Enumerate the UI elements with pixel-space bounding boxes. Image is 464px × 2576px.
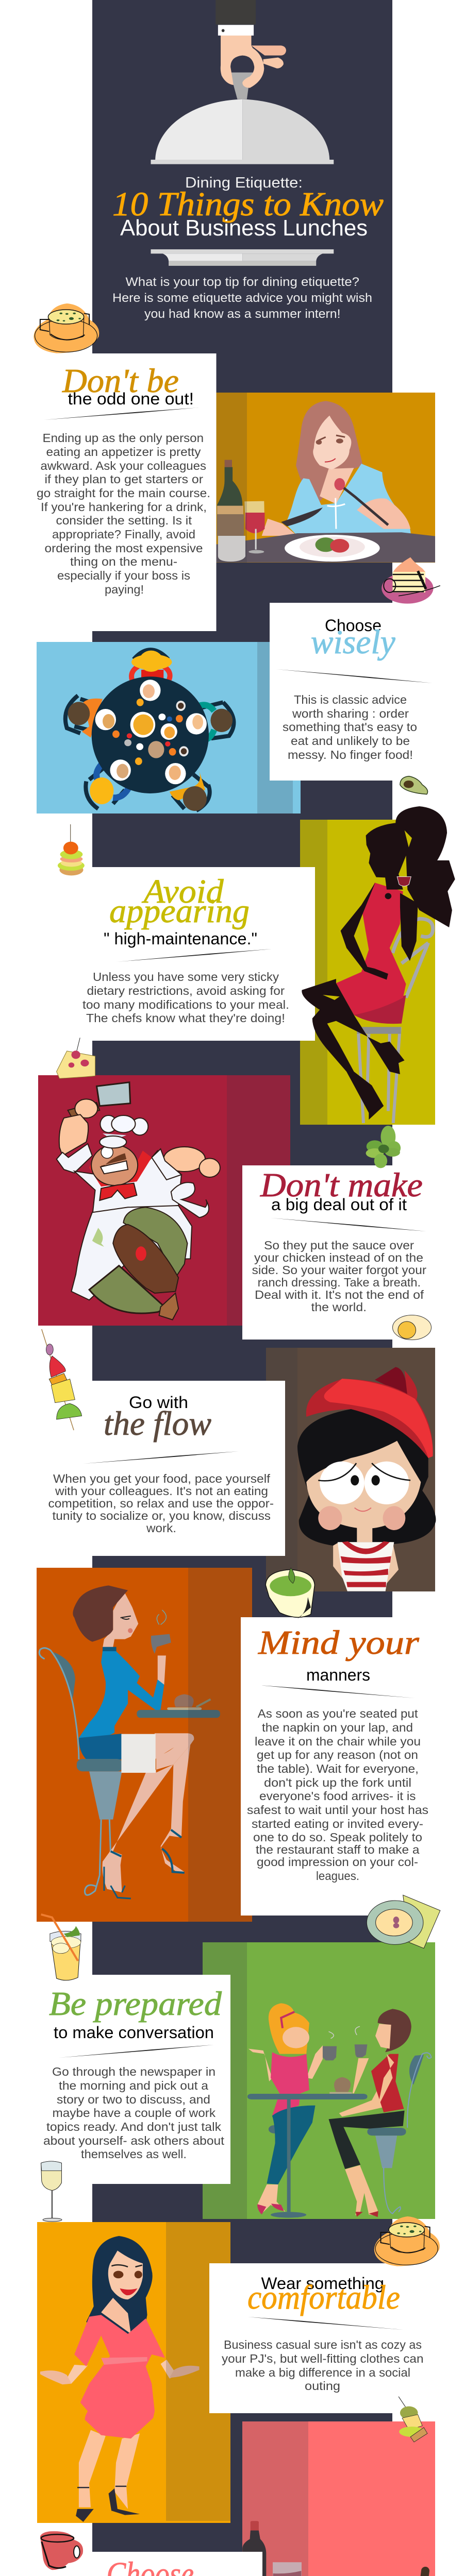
body text: your PJ's, but well-fitting clothes can (222, 2352, 424, 2365)
body text: Ending up as the only person (42, 431, 204, 445)
body text: competition, so relax and use the oppor- (48, 1497, 274, 1510)
body text: too many modifications to your meal. (82, 998, 289, 1011)
body text (43, 2065, 225, 2161)
body text: don't pick up the fork until (264, 1776, 411, 1789)
icon: cheese with cherry (57, 1038, 95, 1078)
body text: safest to wait until your host has (247, 1803, 428, 1817)
round table seen from above (65, 650, 234, 811)
card: avoid appearing high-maintenance: appearing (109, 892, 250, 930)
body text (48, 1472, 274, 1535)
body text (252, 1239, 426, 1314)
body text: eating an appetizer is pretty (46, 445, 201, 459)
heading: Choose (325, 616, 382, 635)
body text: paying! (105, 583, 144, 596)
body text: leave it on the chair while you (255, 1735, 421, 1748)
heading: Wear something (261, 2274, 384, 2293)
body text: Business casual sure isn't as cozy as (224, 2338, 422, 2351)
intro text: What is your top tip for dining etiquette? (126, 275, 359, 289)
body text: ranch dressing. Take a breath. (258, 1276, 421, 1289)
header illustration: hand lifting cloche (151, 0, 334, 266)
card: wear something comfortable: comfortable (247, 2279, 400, 2316)
body text: The chefs know what they're doing! (86, 1011, 285, 1025)
woman in pink wrap dress (40, 2236, 200, 2522)
body text: the table). Wait for everyone, (257, 1762, 419, 1775)
icon: canape skewer (58, 824, 85, 875)
two women talking over coffee (247, 2003, 432, 2218)
panel: go with the flow illustration (266, 1348, 436, 1591)
card: don't be the odd one out: the odd one out! (68, 389, 194, 408)
body text: topics ready. And don't just talk (46, 2120, 222, 2133)
intro text: you had know as a summer intern! (144, 307, 340, 321)
heading: Mind your (258, 1624, 419, 1662)
body text: with your colleagues. It's not an eating (55, 1484, 268, 1498)
body text: maybe have a couple of work (53, 2106, 216, 2120)
body text: the restaurant staff to make a (256, 1843, 420, 1856)
angry chef (57, 1082, 220, 1320)
illustration: silhouette woman with wine (302, 806, 455, 1123)
icon: boiled egg (393, 1315, 432, 1340)
body text (247, 1707, 428, 1883)
heading: Don't be (62, 362, 179, 400)
body text: If you're hankering for a drink, (41, 500, 207, 514)
panel: choose your seat illustration (242, 2421, 435, 2576)
card: be prepared to make conversation (43, 1975, 230, 2184)
card: go with the flow: the flow (104, 1405, 211, 1443)
icon: soup cup on saucer, repeated (374, 2216, 440, 2266)
body text: if they plan to get starters or (44, 472, 203, 486)
body text: So they put the sauce over (264, 1239, 414, 1252)
card: avoid appearing high-maintenance: " high-maintenance." (104, 929, 257, 948)
body text: awkward. Ask your colleagues (40, 459, 206, 472)
body text (82, 970, 289, 1025)
body text: especially if your boss is (57, 569, 190, 582)
body text: everyone's food arrives- it is (259, 1789, 416, 1803)
body text (283, 693, 417, 761)
panel: don't be the odd one out illustration (216, 393, 435, 563)
card: mind your manners: manners (306, 1666, 370, 1684)
table setting, chair and plant (242, 2521, 430, 2576)
girl in red beret (297, 1367, 436, 1591)
card: choose your seat carefully (56, 2552, 262, 2576)
body text: the napkin on your lap, and (262, 1721, 413, 1734)
icon: green drink (266, 1568, 314, 1619)
woman at cafe table (39, 1585, 220, 1899)
body text: the world. (311, 1300, 367, 1314)
body text: started eating or invited every- (252, 1817, 423, 1831)
body text: thing on the menu- (70, 555, 177, 568)
icon: champagne flute (41, 2161, 62, 2222)
icon: lemonade glass (41, 1914, 81, 1980)
icon: layered dessert (382, 557, 440, 604)
body text: ordering the most expensive (44, 541, 203, 555)
body text: Go through the newspaper in (52, 2065, 216, 2078)
title block: About Business Lunches (120, 215, 368, 241)
body text: themselves as well. (81, 2147, 187, 2161)
icon: fruit skewer (42, 1329, 82, 1430)
body text: As soon as you're seated put (258, 1707, 418, 1720)
card: don't be the odd one out (37, 353, 217, 631)
body text: leagues. (316, 1869, 359, 1883)
body text: consider the setting. Is it (56, 514, 192, 527)
body text: Unless you have some very sticky (93, 970, 279, 984)
body text: appropriate? Finally, avoid (52, 528, 195, 541)
body text: good impression on your col- (257, 1855, 418, 1869)
body text: outing (305, 2379, 340, 2393)
title block: Dining Etiquette: (185, 175, 303, 191)
body text: eat and unlikely to be (291, 734, 410, 748)
card: go with the flow (48, 1381, 285, 1556)
body text: Deal with it. It's not the end of (255, 1288, 424, 1301)
card: choose wisely: wisely (311, 623, 395, 661)
body text: When you get your food, pace yourself (53, 1472, 271, 1485)
card: wear something comfortable (209, 2263, 424, 2413)
body text (222, 2338, 424, 2393)
panel: mind your manners illustration (37, 1568, 252, 1922)
body text: dietary restrictions, avoid asking for (87, 984, 285, 997)
card: avoid appearing high-maintenance (82, 867, 315, 1041)
body text: go straight for the main course. (37, 486, 210, 500)
body text: worth sharing : order (292, 707, 409, 720)
title block (112, 175, 384, 241)
icon: soup cup on saucer (34, 303, 99, 353)
icon: avocado (400, 776, 427, 794)
heading: Be prepared (49, 1985, 222, 2023)
body text: side. So your waiter forgot your (252, 1263, 426, 1277)
body text: messy. No finger food! (288, 748, 413, 761)
card: don't make a big deal out of it (242, 1165, 426, 1340)
icon: olive and cheese pick (399, 2397, 427, 2442)
card: mind your manners (241, 1617, 428, 1916)
woman eating at table (216, 401, 435, 563)
panel: don't make a big deal illustration (38, 1075, 290, 1326)
card: don't make a big deal out of it: a big deal out of it (271, 1195, 407, 1214)
body text: one to do so. Speak politely to (253, 1831, 422, 1844)
panel: be prepared illustration (203, 1942, 435, 2219)
body text: tunity to socialize or, you know, discuss (53, 1509, 271, 1522)
body text: This is classic advice (294, 693, 407, 706)
intro text: Here is some etiquette advice you might wish (112, 291, 372, 305)
body text: your chicken instead of on the (254, 1251, 423, 1264)
icon: red mug (40, 2531, 83, 2570)
heading: Go with (129, 1393, 188, 1412)
body text: make a big difference in a social (235, 2366, 410, 2379)
body text: work. (146, 1521, 176, 1535)
icon: mint sprig (366, 1126, 401, 1168)
heading: Avoid (142, 873, 224, 910)
body text: the morning and pick out a (59, 2079, 208, 2092)
card: choose wisely (270, 603, 432, 781)
card: be prepared to make conversation: to make conversation (54, 2023, 214, 2042)
body text (37, 431, 210, 596)
body text: about yourself- ask others about (43, 2134, 225, 2147)
body text: story or two to discuss, and (57, 2093, 210, 2106)
body text: something that's easy to (283, 720, 417, 734)
intro text (112, 275, 372, 321)
panel: choose wisely illustration (37, 642, 301, 814)
dark background column (92, 0, 392, 2576)
heading: Don't make (260, 1166, 423, 1204)
panel: wear something comfortable illustration (37, 2222, 230, 2523)
title block: 10 Things to Know (112, 185, 384, 223)
body text: get up for any reason (not on (257, 1748, 418, 1761)
icon: plate with napkin (367, 1895, 440, 1948)
panel: avoid appearing high-maintenance background (300, 820, 435, 1125)
